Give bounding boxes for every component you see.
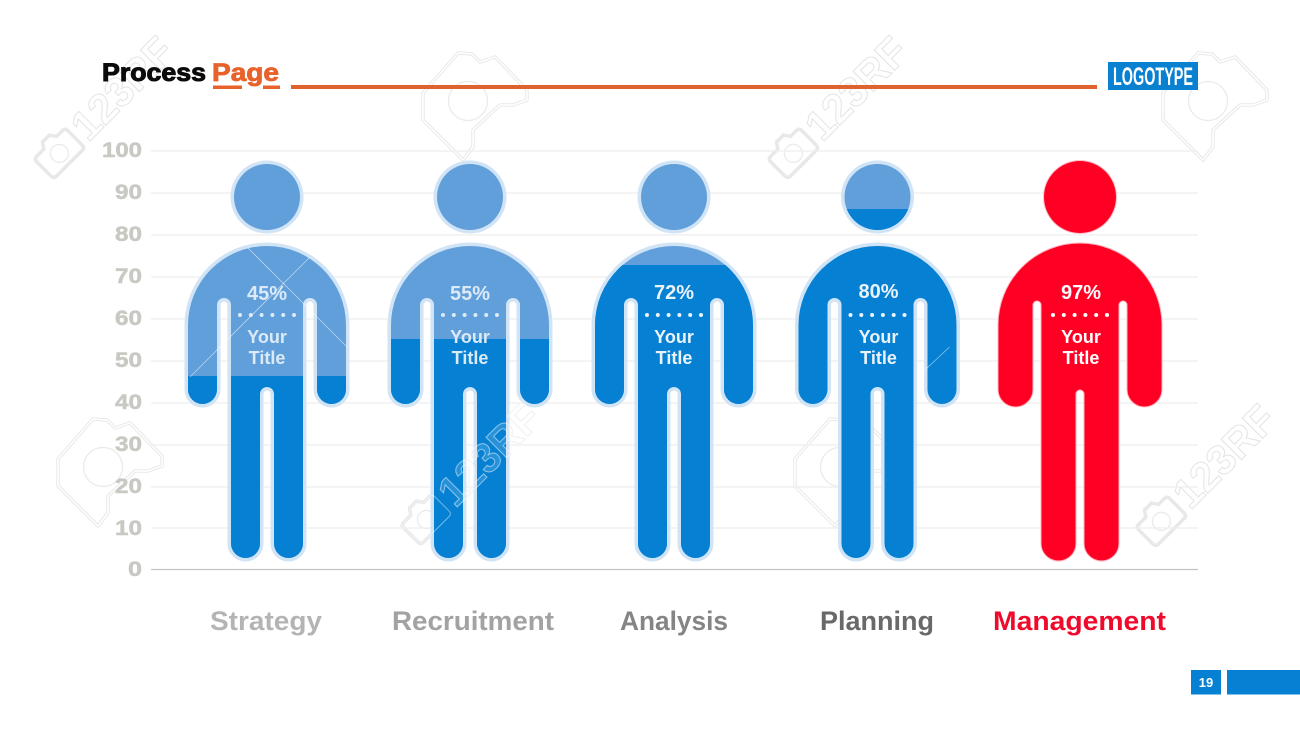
person: Management 97%: 97%: [1061, 282, 1101, 304]
category labels: [210, 606, 1166, 636]
category labels: Recruitment: [392, 606, 554, 636]
watermark: stamp lower left: [58, 419, 162, 526]
page number: [1191, 670, 1221, 694]
category labels: Analysis: [620, 606, 728, 636]
y axis labels: 30: [115, 433, 142, 456]
chart gridlines: [151, 151, 1198, 570]
person: Management 97%: Your: [1061, 327, 1101, 347]
title: [102, 59, 280, 89]
watermark: stamp lower middle right: [795, 419, 899, 526]
category labels: Management: [993, 606, 1166, 636]
y axis labels: 60: [115, 307, 142, 330]
person: Planning 80%: [798, 160, 956, 558]
watermark: stamp over second figure: 123RF: [429, 394, 550, 515]
watermark: stamp top left: 123RF: [62, 28, 183, 149]
person: Management 97%: [1001, 160, 1159, 558]
y axis labels: 90: [115, 181, 142, 204]
header rule: [291, 85, 1097, 89]
y axis labels: 50: [115, 349, 142, 372]
watermark: stamp top right: [1163, 53, 1267, 160]
person: Planning 80%: 80%: [858, 281, 899, 303]
y axis labels: 40: [115, 391, 142, 414]
person: Recruitment 55%: Your: [450, 327, 490, 347]
y axis labels: 10: [115, 517, 142, 540]
logotype: [1108, 62, 1198, 91]
watermark: stamp top middle right: [760, 28, 917, 185]
y axis labels: 100: [102, 139, 142, 162]
y axis labels: 80: [115, 223, 142, 246]
person: Recruitment 55%: 55%: [450, 283, 490, 305]
person: Planning 80%: Your: [859, 327, 898, 347]
y axis labels: [102, 139, 142, 581]
watermark: stamp over second figure: [393, 394, 550, 551]
person: Analysis 72%: Title: [656, 348, 692, 368]
footer bar: [1227, 670, 1300, 694]
y axis labels: 20: [115, 475, 142, 498]
logotype: LOGOTYPE: [1113, 63, 1193, 91]
category labels: Strategy: [210, 606, 322, 636]
person: Strategy 45%: Your: [247, 327, 287, 347]
watermark: stamp top left: [26, 28, 183, 185]
watermark: stamp behind second figure: 123RF: [429, 394, 550, 515]
person: Recruitment 55%: Title: [452, 348, 488, 368]
person: Recruitment 55%: [391, 160, 549, 558]
watermark: stamp lower right: [1128, 396, 1285, 553]
watermark: stamp top centre: [423, 53, 527, 160]
category labels: Planning: [820, 606, 934, 636]
person: Strategy 45%: 45%: [247, 283, 287, 305]
page number: 19: [1199, 675, 1213, 690]
person: Strategy 45%: Title: [249, 348, 285, 368]
y axis labels: 70: [115, 265, 142, 288]
person: Analysis 72%: [595, 160, 753, 558]
person: Analysis 72%: 72%: [654, 282, 694, 304]
y axis labels: 0: [128, 558, 142, 581]
title: Page: [212, 59, 279, 87]
watermark: stamp lower right: 123RF: [1164, 396, 1285, 517]
watermark: stamp top middle right: 123RF: [796, 28, 917, 149]
watermark: stamp behind second figure: [393, 394, 550, 551]
person: Analysis 72%: Your: [654, 327, 694, 347]
title: Process: [102, 59, 206, 87]
person: Planning 80%: Title: [860, 348, 897, 368]
person: Strategy 45%: [188, 160, 347, 558]
person: Management 97%: Title: [1063, 348, 1099, 368]
